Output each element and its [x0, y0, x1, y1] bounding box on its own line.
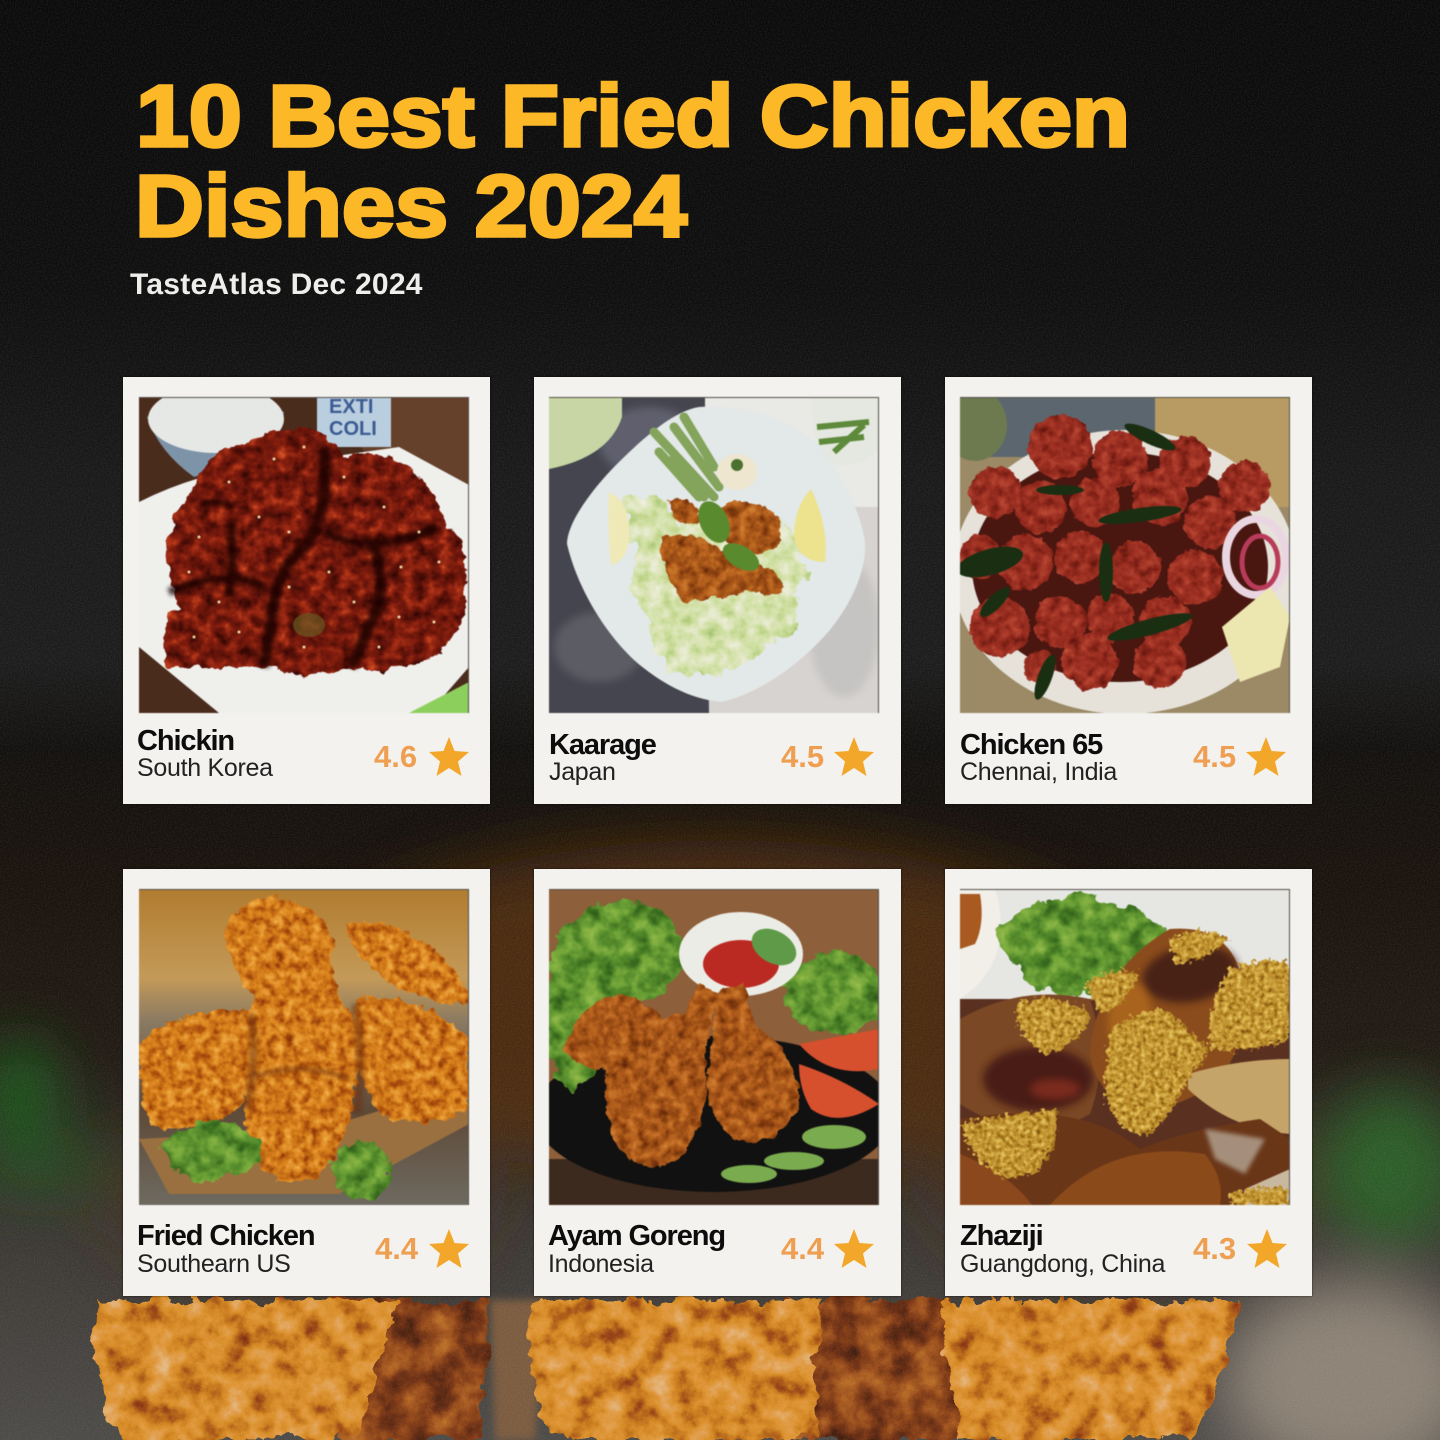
- card: Zhaziji: [945, 869, 1312, 1296]
- dish name and origin: Zhaziji: [960, 1220, 1043, 1252]
- dish name and origin: Southearn US: [137, 1250, 290, 1278]
- dish name and origin: Chicken 65: [960, 729, 1102, 761]
- rating 4.3: 4.3: [1193, 1231, 1236, 1266]
- rating 4.5: [781, 737, 874, 776]
- dish name and origin: [960, 1220, 1166, 1278]
- dish name and origin: [549, 729, 656, 786]
- dish name and origin: [960, 729, 1118, 786]
- rating 4.3: [1193, 1229, 1287, 1268]
- dish name and origin: [137, 725, 274, 782]
- dish name and origin: South Korea: [137, 754, 273, 782]
- dish name and origin: Kaarage: [549, 729, 656, 761]
- photo: kaarage: [548, 396, 880, 714]
- dish name and origin: Japan: [549, 758, 616, 786]
- rating 4.4: [781, 1229, 874, 1268]
- subtitle: TasteAtlas Dec 2024: [130, 268, 423, 301]
- card: Chicken 65: [945, 377, 1312, 804]
- rating 4.5: [1193, 737, 1286, 776]
- dish name and origin: Guangdong, China: [960, 1250, 1165, 1278]
- dish name and origin: Fried Chicken: [137, 1220, 314, 1252]
- card: Chickin: [123, 377, 490, 804]
- card: Fried Chicken: [123, 869, 490, 1296]
- photo: chickin: COLI: [329, 418, 377, 440]
- dish name and origin: Chennai, India: [960, 758, 1117, 786]
- title: [135, 70, 1130, 250]
- photo: fried chicken: [138, 888, 470, 1206]
- card: Kaarage: [534, 377, 901, 804]
- rating 4.4: 4.4: [781, 1231, 824, 1266]
- dish name and origin: Ayam Goreng: [548, 1220, 725, 1252]
- dish name and origin: [548, 1220, 725, 1278]
- rating 4.4: 4.4: [375, 1231, 418, 1266]
- dish name and origin: [137, 1220, 314, 1278]
- card: Ayam Goreng: [534, 869, 901, 1296]
- photo: chicken 65: [959, 396, 1291, 714]
- photo: zhaziji: [959, 888, 1291, 1206]
- rating 4.6: [374, 737, 469, 776]
- photo: ayam goreng: [548, 888, 880, 1206]
- photo: chickin: [138, 396, 470, 714]
- dish name and origin: Indonesia: [548, 1250, 654, 1278]
- rating 4.6: 4.6: [374, 739, 417, 774]
- rating 4.5: 4.5: [781, 739, 824, 774]
- dish name and origin: Chickin: [137, 725, 234, 757]
- rating 4.4: [375, 1229, 469, 1268]
- rating 4.5: 4.5: [1193, 739, 1236, 774]
- title: 10 Best Fried Chicken: [136, 70, 1130, 165]
